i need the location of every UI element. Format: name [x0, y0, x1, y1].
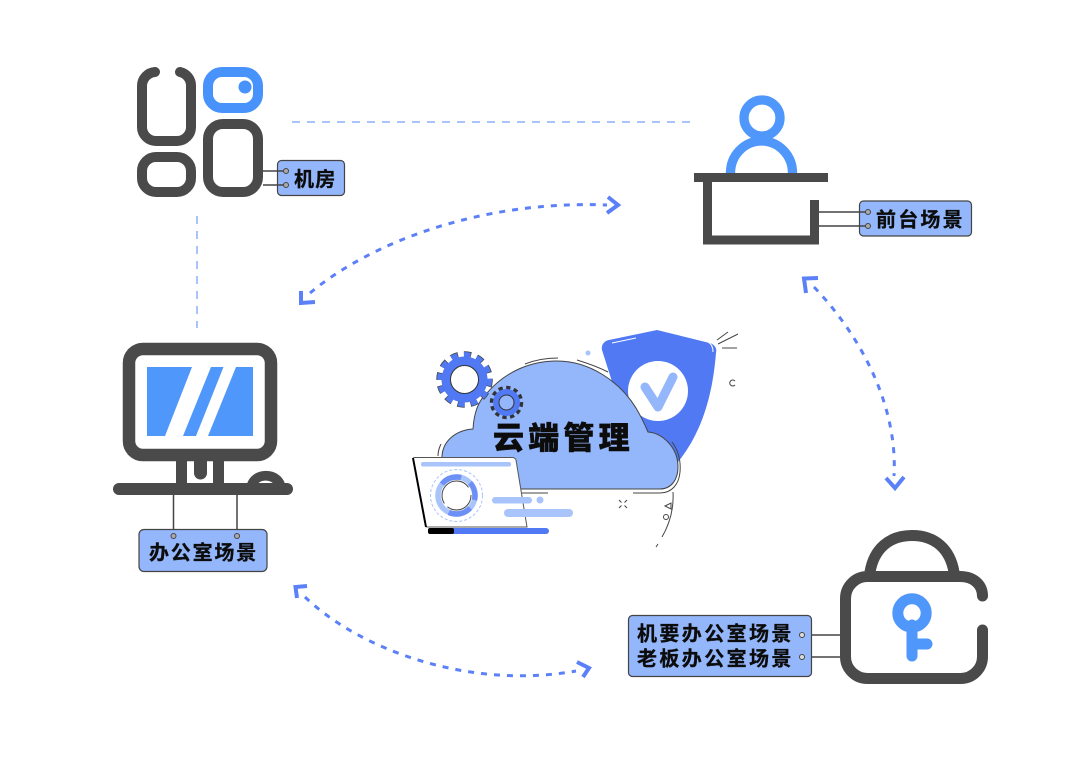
connector: server room to reception — [292, 121, 692, 123]
arrow: office to secure office — [296, 586, 589, 677]
cloud — [442, 361, 678, 489]
label: secure and executive offices — [628, 616, 840, 676]
laptop — [413, 458, 549, 534]
arrow: office to reception — [301, 197, 618, 303]
icon: office computer — [113, 349, 293, 495]
decorative marks — [619, 332, 738, 547]
label: secure and executive offices: 老板办公室场景 — [637, 646, 794, 670]
label: secure and executive offices: 机要办公室场景 — [637, 622, 794, 646]
label: reception — [819, 201, 972, 236]
small gear — [492, 388, 521, 417]
data pills — [492, 496, 573, 517]
connector: server room to office — [196, 216, 198, 328]
icon: reception desk — [694, 100, 828, 240]
shield — [602, 330, 716, 470]
cloud accent strokes — [438, 358, 680, 493]
illustration: cloud management — [413, 330, 738, 547]
label: server room — [263, 160, 344, 196]
icon: server room — [142, 72, 258, 192]
title: 云端管理 — [493, 421, 634, 456]
icon: lock with key — [845, 536, 983, 679]
big gear — [439, 354, 490, 405]
decorative dot — [586, 350, 590, 356]
label: office — [139, 495, 267, 572]
label: reception: 前台场景 — [876, 208, 965, 232]
arrow: reception to secure office — [804, 278, 904, 488]
label: server room: 机房 — [294, 168, 336, 191]
label: office: 办公室场景 — [149, 540, 258, 564]
